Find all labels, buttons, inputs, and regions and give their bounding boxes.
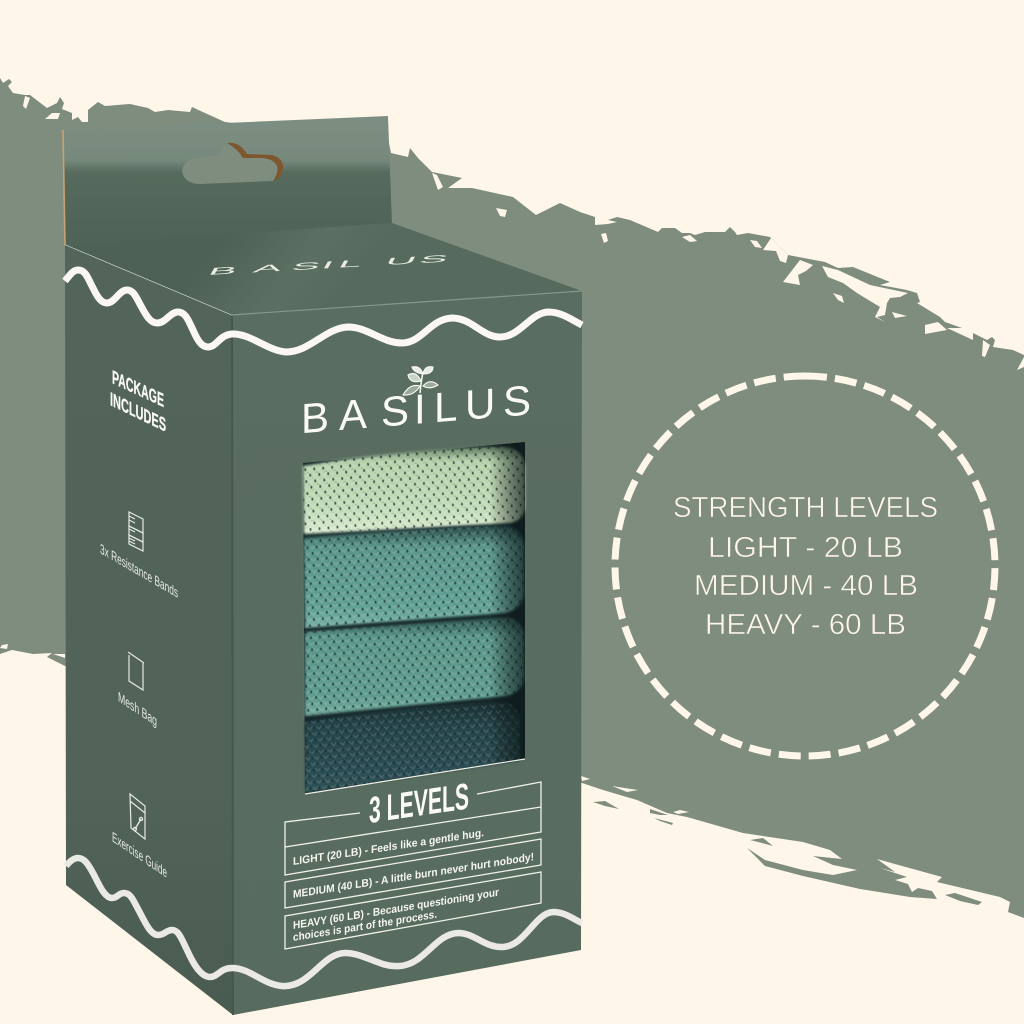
band: medium-light [304, 526, 524, 628]
box left face [65, 245, 233, 1015]
hole inner edge [227, 143, 283, 181]
dashed circle badge [615, 376, 995, 756]
level text: choices is part of the process. [293, 909, 437, 944]
icon: resistance bands [129, 512, 143, 551]
level text: LIGHT (20 LB) - Feels like a gentle hug. [293, 827, 484, 868]
logo: BASILUS: BASILUS [301, 376, 531, 442]
band: light [303, 447, 525, 534]
strength levels text: MEDIUM - 40 LB [694, 570, 918, 602]
window: folded bands [303, 442, 525, 794]
level text: HEAVY (60 LB) - Because questioning your [293, 887, 500, 932]
levels panel [285, 775, 541, 949]
bottom wave [66, 858, 582, 986]
label: mesh bag: Mesh Bag [118, 689, 157, 730]
band: medium [305, 617, 524, 716]
side heading: package includes: PACKAGE [112, 367, 164, 412]
brush splash cut-outs [0, 96, 1024, 814]
box top flap [65, 223, 582, 315]
product box [63, 116, 582, 1015]
band: dark [305, 702, 520, 793]
icon: exercise guide [130, 794, 145, 839]
strength levels text: LIGHT - 20 LB [708, 532, 903, 564]
box front face [231, 291, 582, 1015]
top wave [65, 270, 582, 352]
level text [293, 827, 534, 944]
side heading: package includes: INCLUDES [110, 389, 166, 437]
hang hole [182, 142, 283, 184]
level frames [285, 782, 541, 949]
hanger tab [63, 116, 392, 245]
brush slivers [593, 801, 982, 905]
strength levels text: STRENGTH LEVELS [673, 492, 938, 524]
icon: basil plant [403, 367, 438, 395]
heading: 3 levels: 3 LEVELS [369, 775, 469, 831]
icon: mesh bag [128, 652, 144, 690]
side heading: package includes [110, 367, 166, 437]
label: resistance bands: 3x Resistance Bands [100, 541, 178, 602]
strength levels text: HEAVY - 60 LB [705, 609, 906, 641]
flap logo: BASILUS [206, 252, 451, 277]
level text: MEDIUM (40 LB) - A little burn never hurt nobody! [293, 851, 534, 901]
strength levels text [673, 492, 938, 641]
label: exercise guide: Exercise Guide [112, 829, 167, 882]
